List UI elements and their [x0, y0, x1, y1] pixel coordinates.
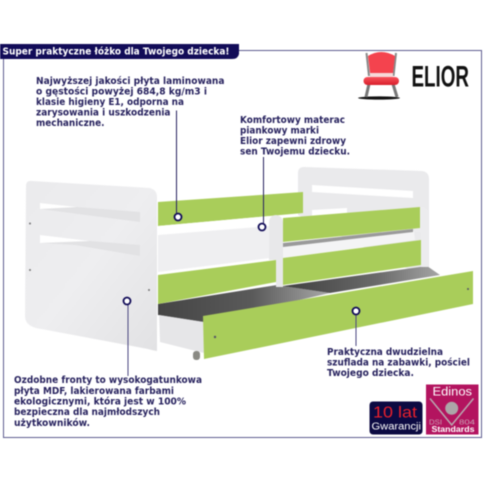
badge: Edinos standards: DSI [429, 418, 442, 426]
callout: mattress [240, 115, 350, 230]
white rail slot [283, 231, 415, 258]
drawer opening dark interior [158, 285, 330, 322]
wheel [193, 351, 200, 360]
heading banner: Super praktyczne łóżko dla Twojego dziecka! [2, 46, 230, 58]
text block: piankowy marki [240, 126, 319, 136]
callout: top quality board [36, 76, 224, 220]
text block: szuflada na zabawki, pościel [327, 358, 470, 368]
marker [124, 298, 130, 304]
logo: Elior [358, 52, 469, 100]
text block: Komfortowy materac [240, 115, 345, 126]
badge: Edinos standards [426, 384, 478, 434]
callout: decorative fronts [14, 298, 202, 429]
text block: ekologicznymi, która jest w 100% [14, 396, 187, 408]
text block: płyta MDF, lakierowana farbami [14, 386, 174, 397]
safety rail lower [283, 240, 421, 285]
text block: bezpieczna dla najmłodszych [14, 407, 160, 418]
badge: Edinos standards: Standards [432, 425, 475, 434]
bed illustration [25, 167, 473, 360]
drawer front [203, 271, 473, 359]
text block: Elior zapewni zdrowy [240, 136, 346, 147]
right headboard [298, 167, 429, 270]
lower side rail left [158, 260, 276, 304]
badge: Edinos standards: Edinos [432, 386, 472, 398]
drawer white side [159, 315, 204, 353]
middle post [269, 215, 283, 287]
text block: klasie higieny E1, odporna na [36, 97, 184, 108]
marker [174, 214, 182, 220]
text block [36, 76, 224, 129]
leader line [127, 305, 129, 376]
frame border [4, 50, 482, 438]
leader line [262, 157, 264, 223]
text block: mechaniczne. [36, 118, 104, 129]
badge: Edinos standards: 804 [459, 418, 475, 426]
text block [327, 347, 470, 379]
text block [14, 375, 202, 429]
mattress [158, 226, 270, 272]
text block: sen Twojemu dziecku. [240, 146, 350, 158]
back rail [158, 192, 303, 226]
safety rail upper [283, 207, 420, 242]
callout: drawer [327, 308, 470, 379]
text block: Ozdobne fronty to wysokogatunkowa [14, 375, 202, 386]
marker [258, 224, 266, 230]
white rail under back [158, 216, 270, 235]
left headboard [25, 181, 157, 351]
badge: 10 year warranty: 10 lat [373, 404, 418, 422]
text block: Twojego dziecka. [327, 368, 414, 379]
icon: red chair [358, 52, 400, 100]
right rail post [415, 207, 428, 267]
text block: użytkowników. [14, 418, 90, 429]
text block: o gęstości powyżej 684,8 kg/m3 i [36, 86, 207, 98]
leader line [176, 110, 178, 213]
text block: zarysowania i uszkodzenia [36, 108, 170, 118]
badge: 10 year warranty: Gwarancji [372, 422, 421, 432]
text block [240, 115, 350, 158]
badge: 10 year warranty [370, 402, 422, 434]
marker [352, 308, 360, 314]
leader line [355, 314, 357, 346]
text block: Najwyższej jakości płyta laminowana [36, 76, 224, 87]
text block: Praktyczna dwudzielna [327, 347, 443, 358]
